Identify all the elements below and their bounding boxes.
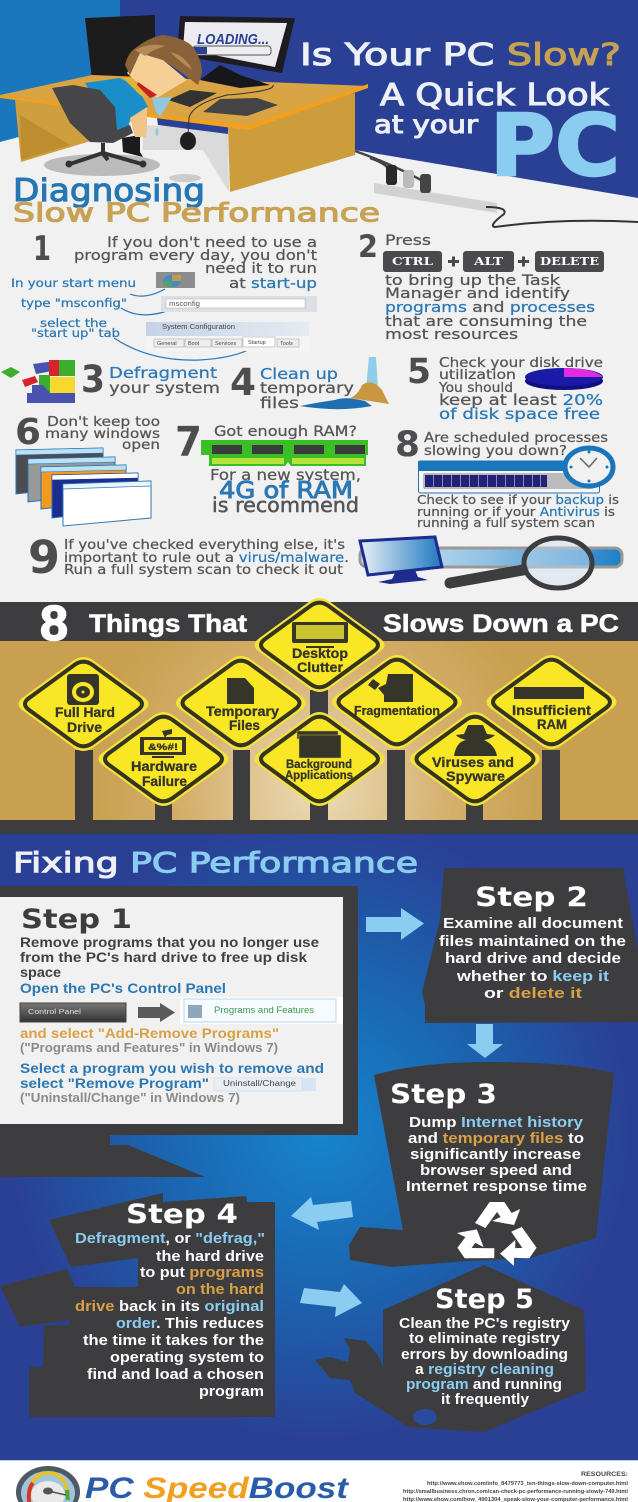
title: A Quick Look [380, 78, 610, 113]
resources: http://www.ehow.com/info_8479773_ten-things-slow-down-computer.html [427, 1481, 628, 1487]
panel: tip 4: temporary [260, 379, 354, 397]
step 3: Dump Internet history [409, 1114, 584, 1131]
panel: tip 3: your system [109, 379, 220, 397]
heading: diagnosing [13, 173, 380, 228]
programs and features box [180, 997, 343, 1024]
panel: tip 5: of disk space free [439, 405, 600, 423]
resources [403, 1471, 628, 1502]
step 5: it frequently [441, 1392, 529, 1408]
sign: viruses and spyware [410, 712, 540, 806]
step 1: ("Programs and Features" in Windows 7) [20, 1041, 278, 1055]
system configuration window: System Configuration [162, 324, 235, 331]
tip 2 text: to bring up the Task [385, 273, 561, 289]
panel: tip 8: 8 [395, 425, 420, 465]
step 5: Step 5 [435, 1284, 534, 1315]
panel: tip 7: Got enough RAM? [214, 424, 357, 440]
system configuration window: Tools [280, 341, 293, 347]
sign: full hard drive: Drive [67, 720, 102, 735]
sign: viruses and spyware: Viruses and [432, 755, 514, 770]
heading: diagnosing: Slow PC Performance [13, 198, 380, 228]
panel: tip 9: 9 [28, 531, 60, 584]
tip 2 text: Manager and identify [385, 286, 570, 302]
panel: tip 4: files [260, 394, 299, 412]
sign: temporary files [176, 656, 306, 750]
heading: diagnosing: Diagnosing [13, 173, 205, 209]
step 1 [0, 886, 358, 1177]
panel: tip 3: 3 [81, 358, 105, 401]
sign: background applications [254, 712, 384, 806]
sign: insufficient RAM: RAM [537, 717, 567, 732]
logo: speed gauge [16, 1466, 80, 1502]
panel: tip 7: For a new system, [210, 466, 361, 484]
icon: progress bar and clock [418, 448, 613, 493]
keyboard keys [383, 251, 604, 272]
sign: background applications: Applications [285, 770, 353, 782]
tip 2 text [385, 273, 595, 343]
tip 1 text: program every day, you don't [74, 248, 317, 264]
heading: 8 things: 8 [40, 597, 68, 651]
panel: tip 9: important to rule out a virus/malware . [64, 551, 349, 566]
panel: tip 3 [1, 358, 220, 403]
step 5: program and running [406, 1377, 562, 1393]
control panel button: Control Panel [28, 1007, 81, 1016]
step 2: whether to keep it [456, 968, 609, 985]
step 4: the hard drive [156, 1248, 264, 1265]
instructions: In your start menu [11, 276, 136, 290]
sign: desktop clutter: Desktop [292, 646, 348, 661]
heading: fixing: Fixing PC Performance [13, 846, 418, 879]
panel: tip 6 [15, 412, 160, 526]
step 4: Defragment , or "defrag," [75, 1230, 265, 1247]
sign: desktop clutter: Clutter [297, 660, 344, 675]
step 1: space [20, 965, 62, 980]
panel: tip 7: 7 [175, 418, 202, 466]
tip 1 text: at start-up [229, 276, 317, 292]
icon: stacked windows [16, 448, 151, 526]
panel: tip 2 [358, 229, 604, 343]
step 1: Open the PC's Control Panel [20, 981, 226, 996]
step 4: operating system to [110, 1349, 264, 1366]
pie chart [525, 368, 603, 390]
title: Is Your PC Slow? [300, 38, 621, 73]
panel: tip 5 [407, 352, 603, 423]
sign: hardware failure: Hardware [131, 759, 198, 774]
panel: tip 8: slowing you down? [424, 443, 567, 459]
panel: tip 9: Run a full system scan to check it out [64, 563, 343, 578]
panel: tip 5: utilization [439, 368, 516, 383]
step 1: and select "Add-Remove Programs" [20, 1026, 279, 1041]
panel: tip 4: 4 [230, 361, 256, 404]
sign: desktop clutter [254, 598, 384, 692]
title [300, 38, 621, 196]
system configuration window: Startup [248, 340, 266, 346]
panel: tip 3: Defragment [109, 364, 217, 382]
step 2: Examine all document [443, 915, 623, 932]
icon: RAM stick [201, 440, 368, 466]
icon: start button [156, 272, 195, 288]
panel: tip 7 [175, 418, 368, 517]
tip 1 text: need it to run [205, 261, 317, 277]
step 3: significantly increase [410, 1146, 581, 1163]
keyboard keys: DELETE [540, 255, 599, 268]
step 1: ("Uninstall/Change" in Windows 7) [20, 1091, 240, 1105]
tip 1 text [74, 235, 317, 292]
step 1: Select a program you wish to remove and [20, 1061, 324, 1076]
panel: tip 2: 2 [358, 229, 378, 265]
panel: tip 4 [230, 357, 389, 412]
resources: RESOURCES: [581, 1471, 628, 1478]
sign: insufficient RAM [486, 655, 616, 749]
panel: tip 2: Press [385, 233, 431, 249]
step 5: errors by downloading [401, 1347, 568, 1363]
heading: 8 things: Slows Down a PC [383, 610, 619, 638]
sign: hardware failure: Failure [142, 774, 187, 789]
system configuration window [146, 322, 309, 351]
panel: tip 8: running or if your Antivirus is [417, 504, 615, 519]
panel: tip 7: is recommend [212, 493, 359, 517]
resources: http://smallbusiness.chron.com/can-check-pc-performance-running-slowly-749.html [403, 1489, 628, 1495]
arrow [138, 1003, 175, 1022]
panel: tip 7: 4G of RAM [219, 478, 353, 504]
sign: fragmentation [332, 655, 462, 749]
sign: temporary files: Files [229, 718, 260, 733]
step 1: select "Remove Program" [20, 1076, 209, 1091]
uninstall button: Uninstall/Change [223, 1079, 297, 1088]
panel: tip 8 [395, 425, 619, 530]
step 1: from the PC's hard drive to free up disk [20, 950, 308, 965]
tip 2 text: that are consuming the [385, 314, 587, 330]
panel: tip 4: Clean up [260, 365, 338, 383]
instructions [11, 276, 254, 360]
icon: power strip and cables [355, 151, 638, 227]
step 2: Step 2 [475, 882, 588, 913]
step 4: on the hard [176, 1281, 264, 1298]
step 4: to put programs [140, 1264, 264, 1281]
msconfig box: msconfig [169, 299, 200, 308]
illustration: computer desk with sleeping user [0, 15, 368, 192]
step 5: Clean the PC's registry [399, 1316, 570, 1332]
panel: tip 5: 5 [407, 352, 431, 392]
panel: 8 things that slow down a PC [0, 597, 638, 834]
panel: tip 9: If you've checked everything else, it's [64, 538, 345, 553]
keyboard keys: ALT [473, 255, 504, 268]
step 3: and temporary files to [408, 1130, 584, 1147]
panel: tip 5: You should [438, 381, 513, 396]
sign: hardware failure [98, 712, 228, 806]
step 3: Internet response time [406, 1178, 587, 1195]
sign: temporary files: Temporary [206, 704, 280, 719]
tip 2 text: most resources [385, 327, 518, 343]
sign: fragmentation: Fragmentation [354, 704, 440, 718]
panel: tip 8: Are scheduled processes [424, 430, 608, 446]
step 5: a registry cleaning [415, 1362, 554, 1378]
step 3: Step 3 [390, 1079, 497, 1110]
sign: insufficient RAM: Insufficient [512, 703, 592, 718]
step 4: find and load a chosen [87, 1366, 264, 1383]
keyboard keys: CTRL [392, 255, 433, 268]
panel: tip 6: many windows [45, 427, 160, 442]
icon: recycle [449, 1202, 544, 1269]
programs and features box: Programs and Features [214, 1005, 315, 1015]
panel: tip 8: Check to see if your backup is [417, 492, 619, 507]
footer [0, 1460, 638, 1502]
tip 2 text: programs and processes [385, 300, 595, 316]
sign: background applications: Background [286, 759, 352, 771]
uninstall button [214, 1078, 316, 1091]
step 3 [349, 1062, 614, 1269]
step 5: to eliminate registry [409, 1331, 560, 1347]
step 2 [422, 868, 638, 1023]
panel: tip 5: keep at least 20% [439, 391, 603, 409]
instructions: select the [40, 316, 107, 330]
panel: tip 9 [28, 531, 622, 588]
step 4: order. This reduces [116, 1315, 264, 1332]
system configuration window: General [157, 341, 177, 347]
panel: tip 6: 6 [15, 412, 41, 453]
arrow: step 1 to step 2 [366, 908, 424, 940]
step 4: drive back in its original [75, 1298, 264, 1315]
title: at your [374, 110, 479, 139]
instructions: "start up" tab [31, 326, 120, 340]
header [0, 0, 638, 228]
step 2: or delete it [484, 985, 582, 1002]
panel: fixing PC performance [0, 834, 638, 1460]
title: PC [490, 97, 620, 196]
msconfig box [161, 296, 317, 312]
arrow: step 2 to step 3 [467, 1024, 503, 1058]
panel: tip 6: Don't keep too [47, 415, 160, 430]
step 2: hard drive and decide [445, 950, 621, 967]
icon: fragmented blocks [1, 360, 75, 403]
instructions: type "msconfig" [21, 296, 127, 310]
step 4: Step 4 [126, 1199, 238, 1230]
arrow: step 3 to step 4 [291, 1197, 353, 1230]
tip 1 text: If you don't need to use a [107, 235, 317, 251]
panel: tip 6: open [122, 438, 160, 453]
heading: 8 things: Things That [89, 610, 248, 638]
step 1: Step 1 [21, 904, 132, 935]
system configuration window: Services [215, 341, 236, 347]
panel: tip 8: running a full system scan [417, 515, 595, 530]
sign: viruses and spyware: Spyware [446, 769, 506, 784]
arrow: step 4 to step 5 [300, 1284, 362, 1317]
step 4: the time it takes for the [83, 1332, 264, 1349]
sign: full hard drive: Full Hard [55, 705, 115, 720]
icon: scan bar, monitor and magnifier [360, 537, 622, 588]
step 5 [315, 1265, 586, 1432]
sign: full hard drive [18, 657, 148, 751]
step 2: files maintained on the [439, 933, 626, 950]
step 3: browser speed and [420, 1162, 572, 1179]
icon: broom and dust [300, 357, 389, 409]
step 4 [0, 1193, 275, 1417]
panel: tip 1: 1 [33, 229, 51, 269]
system configuration window: Boot [188, 341, 200, 347]
control panel button [20, 1003, 126, 1022]
heading: 8 things [40, 597, 619, 651]
panel: tip 1 [11, 229, 317, 360]
step 4: program [199, 1383, 264, 1400]
step 1: Remove programs that you no longer use [20, 935, 320, 950]
sign: hardware failure: &%#! [148, 742, 178, 752]
illustration: computer desk with sleeping user: LOADING... [197, 31, 269, 48]
panel: tip 5: Check your disk drive [439, 356, 603, 371]
